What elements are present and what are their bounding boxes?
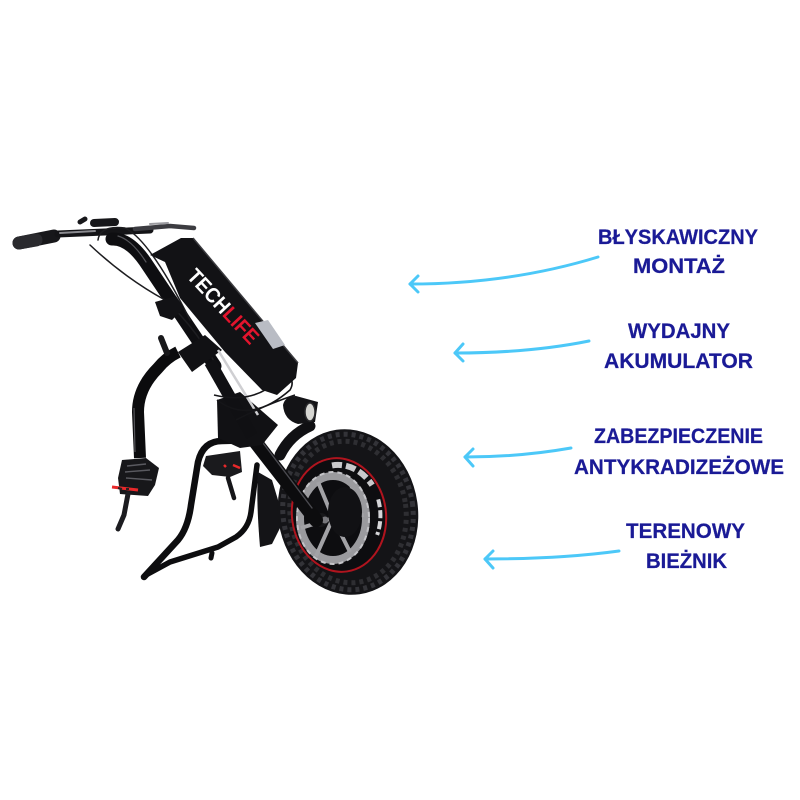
frame core	[217, 392, 278, 448]
callout: wydajny akumulator	[455, 320, 753, 373]
head lamp	[283, 396, 318, 424]
handlebar	[19, 219, 240, 410]
lower frame	[144, 440, 262, 577]
brake disc	[297, 472, 369, 564]
small clamp	[203, 451, 242, 498]
label: TERENOWY	[626, 520, 745, 543]
battery brand: LIFE	[218, 303, 263, 349]
battery label sticker	[255, 320, 285, 349]
battery	[150, 238, 298, 395]
label: WYDAJNY	[628, 320, 730, 343]
battery brand: TECH	[182, 265, 235, 318]
tyre	[267, 420, 429, 604]
arrow	[465, 448, 571, 466]
battery brand	[182, 265, 263, 349]
arrow	[455, 341, 589, 361]
label: ZABEZPIECZENIE	[594, 425, 763, 448]
label: ANTYKRADIZEŻOWE	[574, 456, 784, 479]
arrow	[485, 551, 619, 568]
left clamp arm	[112, 352, 178, 529]
label: BŁYSKAWICZNY	[598, 226, 758, 249]
label: MONTAŻ	[633, 255, 725, 278]
arrow	[410, 257, 598, 292]
callout: błyskawiczny montaż	[410, 226, 758, 292]
callout: terenowy bieżnik	[485, 520, 745, 573]
label: BIEŻNIK	[646, 550, 727, 573]
mudguard bracket	[257, 472, 284, 547]
label: AKUMULATOR	[604, 350, 753, 373]
wheel	[267, 420, 429, 604]
product: electric wheelchair attachment	[19, 219, 429, 604]
fork	[250, 426, 316, 520]
stem and cables	[155, 296, 295, 436]
callout: zabezpieczenie antykradzieżowe	[465, 425, 784, 479]
rim	[285, 452, 393, 578]
